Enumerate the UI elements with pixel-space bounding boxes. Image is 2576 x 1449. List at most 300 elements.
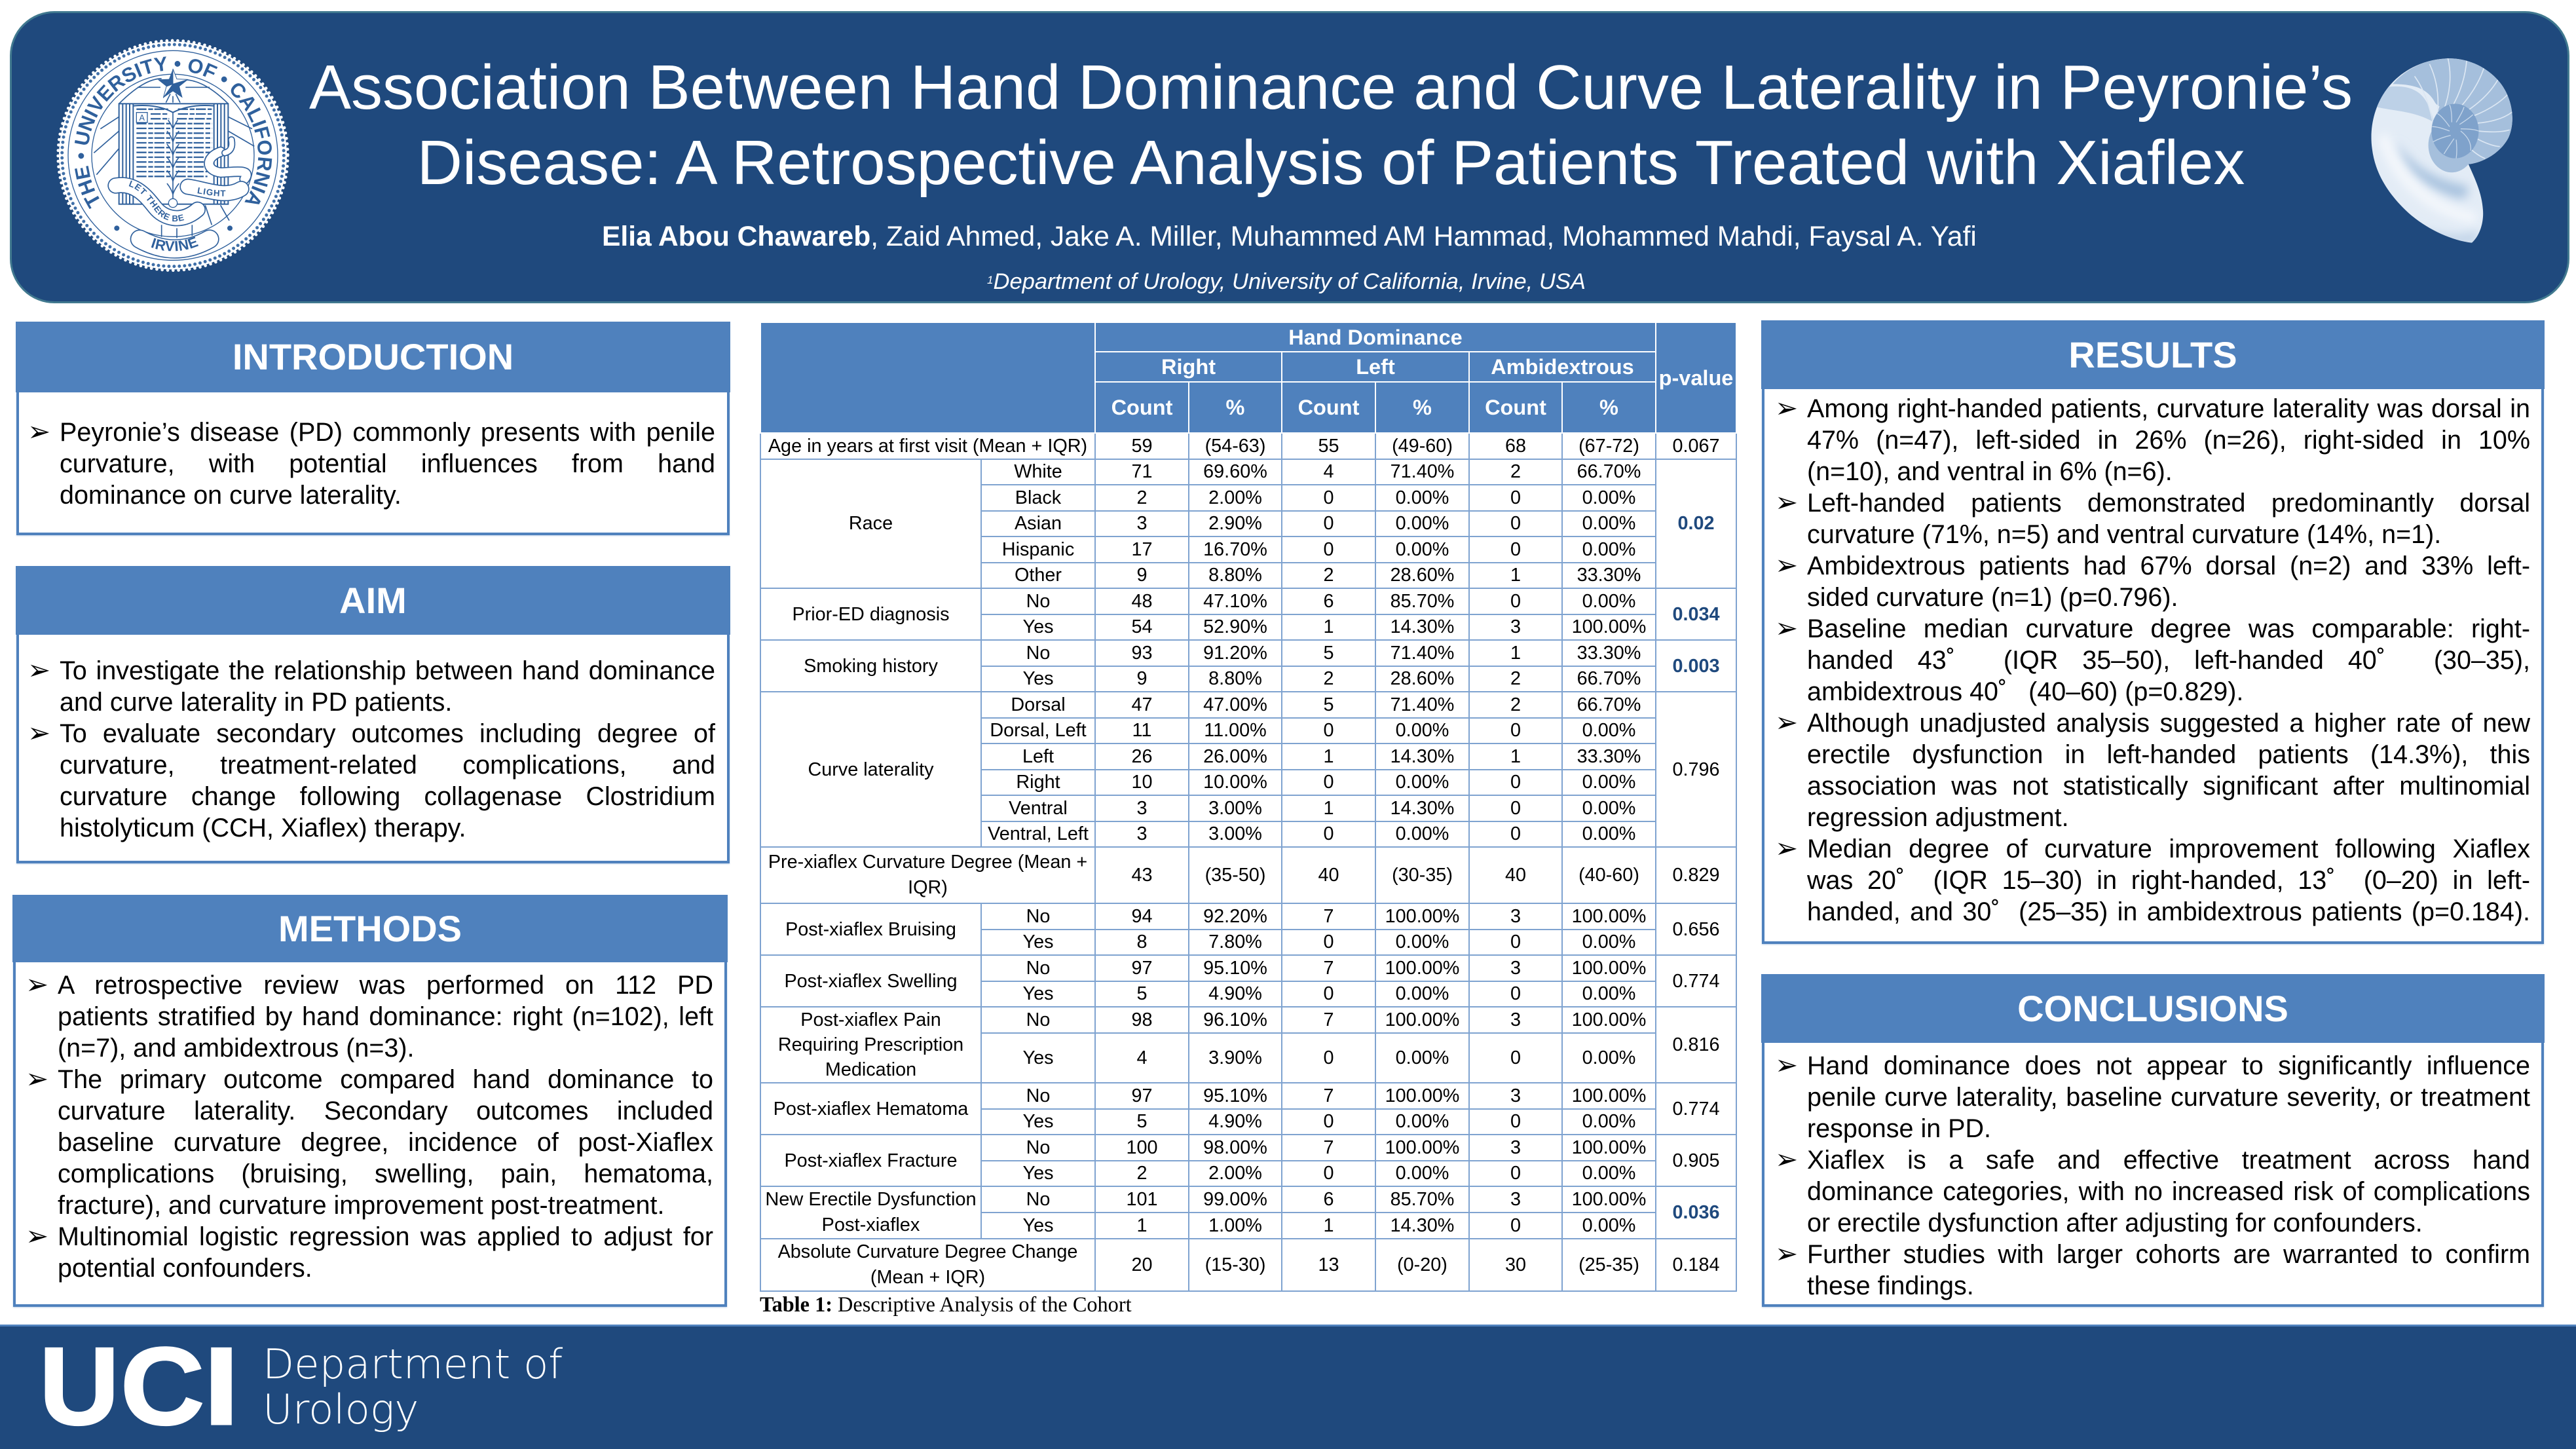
row: pre-xiaflex curvature degree: 40 bbox=[1318, 865, 1339, 886]
rows: new erectile dysfunction: 3 bbox=[1510, 1189, 1521, 1210]
rows: post-xiaflex bruising: 94 bbox=[1131, 906, 1153, 927]
text: results: Among right-handed patients, curvature laterality was dorsal in bbox=[1807, 394, 2530, 423]
text: conclusions: Xiaflex is a safe and effective treatment across hand bbox=[1807, 1146, 2530, 1175]
rows: post-xiaflex fracture: 0.00% bbox=[1582, 1163, 1635, 1184]
rows: race: 0 bbox=[1323, 539, 1334, 560]
rows: curve laterality: 14.30% bbox=[1391, 746, 1454, 767]
rows: prior-ED diagnosis: 54 bbox=[1131, 616, 1153, 637]
rows: post-xiaflex swelling: 0 bbox=[1323, 983, 1334, 1004]
rows: race: 2 bbox=[1136, 487, 1148, 508]
rows: new erectile dysfunction: 99.00% bbox=[1203, 1189, 1267, 1210]
rows: curve laterality: Curve laterality bbox=[808, 759, 934, 780]
rows: post-xiaflex hematoma: 4.90% bbox=[1208, 1111, 1262, 1132]
rows: race: 71.40% bbox=[1391, 461, 1454, 482]
rows: race: 28.60% bbox=[1391, 565, 1454, 586]
row: absolute curvature degree change: (25-35) bbox=[1578, 1254, 1639, 1275]
rows: curve laterality bbox=[808, 694, 1720, 844]
rows: post-xiaflex pain: No bbox=[1026, 1009, 1050, 1030]
rows: race: Other bbox=[1015, 565, 1062, 586]
rows: prior-ED diagnosis: No bbox=[1026, 591, 1050, 612]
panel: results: ➢ bbox=[1775, 486, 1798, 518]
rows: post-xiaflex bruising: 7.80% bbox=[1208, 932, 1262, 952]
rows: smoking history bbox=[804, 643, 1720, 689]
rows: curve laterality: 3.00% bbox=[1208, 823, 1262, 844]
rows: race: 69.60% bbox=[1203, 461, 1267, 482]
rows: race: 0.00% bbox=[1582, 487, 1635, 508]
row: absolute curvature degree change: (Mean + IQR) bbox=[870, 1267, 985, 1288]
rows: post-xiaflex pain: 100.00% bbox=[1572, 1009, 1646, 1030]
rows: post-xiaflex fracture: 98.00% bbox=[1203, 1137, 1267, 1158]
rows: curve laterality: Left bbox=[1022, 746, 1054, 767]
rows: curve laterality: 10.00% bbox=[1203, 772, 1267, 793]
rows: smoking history: Yes bbox=[1023, 668, 1053, 689]
rows: new erectile dysfunction: 1.00% bbox=[1208, 1215, 1262, 1236]
text: results: curvature (71%, n=5) and ventral curvature (14%, n=1). bbox=[1807, 520, 2441, 549]
rows: post-xiaflex bruising: 0 bbox=[1510, 932, 1521, 952]
row: age bbox=[768, 436, 1720, 457]
rows: curve laterality: 0.00% bbox=[1582, 772, 1635, 793]
rows: smoking history: 66.70% bbox=[1577, 668, 1641, 689]
text: methods: potential confounders. bbox=[58, 1254, 312, 1283]
rows: smoking history: 8.80% bbox=[1208, 668, 1262, 689]
text: conclusions: response in PD. bbox=[1807, 1114, 1991, 1143]
text: methods bbox=[26, 968, 713, 1283]
table header: % bbox=[1226, 396, 1244, 419]
row: pre-xiaflex curvature degree: 43 bbox=[1131, 865, 1153, 886]
table header: Left bbox=[1356, 355, 1395, 379]
table header: Count bbox=[1485, 396, 1546, 419]
heading: conclusions bbox=[1761, 974, 2545, 1043]
rows: post-xiaflex hematoma: 5 bbox=[1136, 1111, 1148, 1132]
icon: university seal: A bbox=[139, 113, 145, 122]
row: age: (49-60) bbox=[1392, 436, 1453, 457]
rows: new erectile dysfunction: Yes bbox=[1023, 1215, 1053, 1236]
icon: nautilus shell bbox=[2371, 58, 2512, 243]
panel: results: ➢ bbox=[1775, 832, 1798, 864]
rows: smoking history: 2 bbox=[1510, 668, 1521, 689]
rows: post-xiaflex bruising: No bbox=[1026, 906, 1050, 927]
rows: curve laterality: 1 bbox=[1323, 746, 1334, 767]
rows: curve laterality: 47 bbox=[1131, 694, 1153, 715]
rows: post-xiaflex hematoma: 100.00% bbox=[1572, 1085, 1646, 1106]
rows: post-xiaflex pain: Post-xiaflex Pain bbox=[800, 1009, 941, 1030]
table header: Hand Dominance bbox=[1288, 325, 1463, 348]
rows: post-xiaflex swelling: 95.10% bbox=[1203, 958, 1267, 979]
rows: race: 71 bbox=[1131, 461, 1153, 482]
department name: Urology bbox=[263, 1385, 419, 1433]
rows: smoking history: 5 bbox=[1323, 643, 1334, 664]
rows: post-xiaflex bruising: 0 bbox=[1323, 932, 1334, 952]
rows: race: 2 bbox=[1323, 565, 1334, 586]
panel: conclusions: ➢ bbox=[1775, 1049, 1798, 1081]
rows: smoking history: Smoking history bbox=[804, 655, 938, 676]
table header: % bbox=[1413, 396, 1432, 419]
icon: UCI logo bbox=[33, 1336, 242, 1435]
text: conclusions: Hand dominance does not appear to significantly influence bbox=[1807, 1051, 2530, 1080]
rows: race: White bbox=[1014, 461, 1062, 482]
rows: curve laterality: 0.00% bbox=[1396, 720, 1449, 741]
rows: post-xiaflex swelling: 5 bbox=[1136, 983, 1148, 1004]
rows: curve laterality: 11.00% bbox=[1204, 720, 1267, 741]
panel: methods bbox=[12, 895, 728, 1308]
rows: curve laterality: 0.00% bbox=[1582, 720, 1635, 741]
rows: prior-ED diagnosis: 0.00% bbox=[1582, 591, 1635, 612]
rows: post-xiaflex pain: 0 bbox=[1510, 1047, 1521, 1068]
authors: Elia Abou Chawareb, Zaid Ahmed, Jake A. Miller, Muhammed AM Hammad, Mohammed Mahdi, Faysal A. Yafi bbox=[602, 221, 1977, 252]
text: results: regression adjustment. bbox=[1807, 803, 2069, 832]
rows: smoking history: 0.003 bbox=[1672, 655, 1720, 676]
rows: curve laterality: 26.00% bbox=[1203, 746, 1267, 767]
rows: prior-ED diagnosis: 14.30% bbox=[1391, 616, 1454, 637]
text: methods: A retrospective review was performed on 112 PD bbox=[58, 971, 713, 1000]
rows: new erectile dysfunction: Post-xiaflex bbox=[822, 1214, 920, 1235]
panel: results bbox=[1761, 320, 2545, 945]
rows: race: 8.80% bbox=[1208, 565, 1262, 586]
row: pre-xiaflex curvature degree: Pre-xiaflex Curvature Degree (Mean + bbox=[768, 852, 1087, 873]
text: conclusions: these findings. bbox=[1807, 1271, 1974, 1300]
title: Association Between Hand Dominance and Curve Laterality in Peyronie’s bbox=[309, 52, 2353, 122]
text: methods: fracture), and curvature improvement post-treatment. bbox=[58, 1191, 664, 1220]
text: results: sided curvature (n=1) (p=0.796). bbox=[1807, 583, 2178, 612]
rows: post-xiaflex fracture: 0 bbox=[1323, 1163, 1334, 1184]
heading: introduction: INTRODUCTION bbox=[233, 336, 513, 377]
rows: new erectile dysfunction: No bbox=[1026, 1189, 1050, 1210]
text: results: Left-handed patients demonstrated predominantly dorsal bbox=[1807, 489, 2530, 518]
rows: smoking history: 71.40% bbox=[1391, 643, 1454, 664]
rows: post-xiaflex pain: 0 bbox=[1323, 1047, 1334, 1068]
panel: results: ➢ bbox=[1775, 549, 1798, 581]
title: Disease: A Retrospective Analysis of Patients Treated with Xiaflex bbox=[417, 128, 2245, 198]
row: absolute curvature degree change: (15-30) bbox=[1205, 1254, 1265, 1275]
affiliation: 1Department of Urology, University of California, Irvine, USA bbox=[987, 269, 1586, 294]
text: introduction: dominance on curve laterality. bbox=[60, 481, 401, 510]
rows: post-xiaflex pain: Requiring Prescription bbox=[778, 1034, 963, 1055]
rows: race: 4 bbox=[1323, 461, 1334, 482]
row: age: 0.067 bbox=[1672, 436, 1720, 457]
table header: Right bbox=[1161, 355, 1216, 379]
text: results: (n=10), and ventral in 6% (n=6). bbox=[1807, 457, 2173, 486]
rows: curve laterality: 3 bbox=[1136, 823, 1148, 844]
rows: post-xiaflex swelling: 0.00% bbox=[1396, 983, 1449, 1004]
row: absolute curvature degree change: 13 bbox=[1318, 1254, 1339, 1275]
rows: prior-ED diagnosis: 52.90% bbox=[1203, 616, 1267, 637]
rows: curve laterality: Dorsal bbox=[1011, 694, 1066, 715]
rows: curve laterality: 0.00% bbox=[1396, 823, 1449, 844]
rows: curve laterality: 0 bbox=[1510, 720, 1521, 741]
rows: race: 17 bbox=[1131, 539, 1153, 560]
rows: curve laterality: 0 bbox=[1323, 772, 1334, 793]
rows: post-xiaflex fracture: 100.00% bbox=[1385, 1137, 1459, 1158]
text: methods: The primary outcome compared hand dominance to bbox=[58, 1065, 713, 1094]
rows: post-xiaflex swelling: 0.774 bbox=[1672, 971, 1720, 992]
text: aim bbox=[28, 654, 715, 842]
text: results: Ambidextrous patients had 67% dorsal (n=2) and 33% left- bbox=[1807, 552, 2530, 580]
heading: methods bbox=[12, 895, 728, 962]
rows: race: 2 bbox=[1510, 461, 1521, 482]
title bbox=[309, 52, 2353, 198]
text: methods: Multinomial logistic regression was applied to adjust for bbox=[58, 1222, 713, 1251]
rows: post-xiaflex pain bbox=[778, 1009, 1720, 1080]
heading: conclusions: CONCLUSIONS bbox=[2017, 988, 2288, 1029]
rows: race: Race bbox=[849, 513, 893, 534]
rows: post-xiaflex hematoma: Yes bbox=[1023, 1111, 1053, 1132]
rows: post-xiaflex swelling: 3 bbox=[1510, 958, 1521, 979]
rows: race: 2.00% bbox=[1208, 487, 1262, 508]
rows: prior-ED diagnosis: 85.70% bbox=[1391, 591, 1454, 612]
rows: post-xiaflex bruising bbox=[785, 906, 1720, 952]
table header: % bbox=[1599, 396, 1618, 419]
rows: curve laterality: 0.00% bbox=[1582, 798, 1635, 819]
rows: post-xiaflex bruising: Yes bbox=[1023, 932, 1053, 952]
rows: post-xiaflex fracture: 2 bbox=[1136, 1163, 1148, 1184]
row: absolute curvature degree change: (0-20) bbox=[1397, 1254, 1447, 1275]
rows: new erectile dysfunction: 1 bbox=[1323, 1215, 1334, 1236]
rows: smoking history: 33.30% bbox=[1577, 643, 1641, 664]
rows: curve laterality: 0 bbox=[1323, 720, 1334, 741]
text: conclusions: dominance categories, with no increased risk of complications bbox=[1807, 1177, 2530, 1206]
row: pre-xiaflex curvature degree: (35-50) bbox=[1205, 865, 1265, 886]
row: pre-xiaflex curvature degree: 40 bbox=[1505, 865, 1526, 886]
text: aim: curvature, treatment-related complications, and bbox=[60, 751, 715, 780]
department name: Department of bbox=[263, 1340, 563, 1388]
rows: smoking history: 93 bbox=[1131, 643, 1153, 664]
rows: post-xiaflex pain: 98 bbox=[1131, 1009, 1153, 1030]
text: conclusions bbox=[1807, 1050, 2530, 1302]
rows: curve laterality: 0 bbox=[1510, 823, 1521, 844]
rows: post-xiaflex pain: 4 bbox=[1136, 1047, 1148, 1068]
rows: new erectile dysfunction: 100.00% bbox=[1572, 1189, 1646, 1210]
rows: curve laterality: Ventral bbox=[1009, 798, 1068, 819]
rows: prior-ED diagnosis: 0.034 bbox=[1672, 604, 1720, 625]
rows: post-xiaflex fracture: 100 bbox=[1126, 1137, 1158, 1158]
rows: new erectile dysfunction: 0.00% bbox=[1582, 1215, 1635, 1236]
rows: race: 0 bbox=[1510, 539, 1521, 560]
rows: curve laterality: 47.00% bbox=[1203, 694, 1267, 715]
rows: race: Asian bbox=[1015, 513, 1062, 534]
rows: post-xiaflex fracture: 3 bbox=[1510, 1137, 1521, 1158]
table: descriptive analysis of the cohort bbox=[760, 323, 1737, 1292]
rows: curve laterality: 26 bbox=[1131, 746, 1153, 767]
panel: methods: ➢ bbox=[26, 1220, 48, 1252]
heading: aim bbox=[16, 566, 730, 635]
text: aim: To evaluate secondary outcomes including degree of bbox=[60, 719, 715, 748]
rows: post-xiaflex bruising: 100.00% bbox=[1385, 906, 1459, 927]
rows: race: 66.70% bbox=[1577, 461, 1641, 482]
rows: post-xiaflex hematoma: 0 bbox=[1323, 1111, 1334, 1132]
row: pre-xiaflex curvature degree: (40-60) bbox=[1578, 865, 1639, 886]
heading: methods: METHODS bbox=[278, 908, 462, 949]
rows: post-xiaflex hematoma: 100.00% bbox=[1385, 1085, 1459, 1106]
rows: post-xiaflex swelling: 0.00% bbox=[1582, 983, 1635, 1004]
rows: post-xiaflex fracture: 7 bbox=[1323, 1137, 1334, 1158]
panel: aim: ➢ bbox=[28, 717, 50, 749]
rows: race: 2.90% bbox=[1208, 513, 1262, 534]
text: conclusions: or erectile dysfunction after adjusting for confounders. bbox=[1807, 1209, 2423, 1237]
text: methods: baseline curvature degree, incidence of post-Xiaflex bbox=[58, 1128, 713, 1157]
text: methods: patients stratified by hand dominance: right (n=102), left bbox=[58, 1002, 713, 1031]
rows: post-xiaflex fracture: 0 bbox=[1510, 1163, 1521, 1184]
rows: post-xiaflex pain: 3.90% bbox=[1208, 1047, 1262, 1068]
rows: new erectile dysfunction: 1 bbox=[1136, 1215, 1148, 1236]
row: absolute curvature degree change: Absolute Curvature Degree Change bbox=[778, 1241, 1077, 1262]
rows: post-xiaflex hematoma: 97 bbox=[1131, 1085, 1153, 1106]
text: aim: curvature change following collagenase Clostridium bbox=[60, 782, 715, 811]
rows: curve laterality: 0.00% bbox=[1396, 772, 1449, 793]
row: absolute curvature degree change bbox=[778, 1241, 1720, 1288]
rows: curve laterality: 0 bbox=[1323, 823, 1334, 844]
text: results: handed 43˚ (IQR 35–50), left-handed 40˚ (30–35), bbox=[1807, 646, 2530, 675]
text: results bbox=[1775, 392, 2531, 926]
rows: curve laterality: 10 bbox=[1131, 772, 1153, 793]
rows: new erectile dysfunction: 85.70% bbox=[1391, 1189, 1454, 1210]
rows: post-xiaflex bruising: 7 bbox=[1323, 906, 1334, 927]
heading: aim: AIM bbox=[339, 580, 407, 621]
rows: post-xiaflex swelling bbox=[784, 958, 1720, 1004]
text: conclusions: Further studies with larger cohorts are warranted to confirm bbox=[1807, 1240, 2530, 1269]
rows: race: 0.00% bbox=[1396, 513, 1449, 534]
rows: curve laterality: 0 bbox=[1510, 772, 1521, 793]
rows: curve laterality: 2 bbox=[1510, 694, 1521, 715]
panel: conclusions bbox=[1761, 974, 2545, 1308]
rows: post-xiaflex hematoma bbox=[774, 1085, 1720, 1132]
panel: results: ➢ bbox=[1775, 706, 1798, 738]
rows: prior-ED diagnosis: 0 bbox=[1510, 591, 1521, 612]
text: methods: complications (bruising, swelling, pain, hematoma, bbox=[58, 1159, 713, 1188]
rows: race: 1 bbox=[1510, 565, 1521, 586]
panel: results: ➢ bbox=[1775, 612, 1798, 644]
row: age: (54-63) bbox=[1205, 436, 1265, 457]
rows: post-xiaflex hematoma: 3 bbox=[1510, 1085, 1521, 1106]
rows: race: Hispanic bbox=[1002, 539, 1074, 560]
rows: curve laterality: 0.796 bbox=[1672, 759, 1720, 780]
panel: introduction bbox=[16, 322, 730, 536]
table header: Ambidextrous bbox=[1491, 355, 1634, 379]
rows: prior-ED diagnosis bbox=[792, 591, 1720, 637]
rows: curve laterality: 66.70% bbox=[1577, 694, 1641, 715]
rows: post-xiaflex pain: 100.00% bbox=[1385, 1009, 1459, 1030]
rows: curve laterality: Dorsal, Left bbox=[990, 720, 1087, 741]
rows: post-xiaflex bruising: 100.00% bbox=[1572, 906, 1646, 927]
rows: prior-ED diagnosis: 100.00% bbox=[1572, 616, 1646, 637]
text: results: ambidextrous 40˚ (40–60) (p=0.829). bbox=[1807, 677, 2243, 706]
panel: aim bbox=[16, 566, 730, 865]
text: results: Baseline median curvature degree was comparable: right- bbox=[1807, 614, 2530, 643]
row: pre-xiaflex curvature degree: (30-35) bbox=[1392, 865, 1453, 886]
rays bbox=[94, 79, 254, 238]
rows: post-xiaflex bruising: 3 bbox=[1510, 906, 1521, 927]
rows: race: 16.70% bbox=[1203, 539, 1267, 560]
rows: prior-ED diagnosis: 3 bbox=[1510, 616, 1521, 637]
rows: curve laterality: 0 bbox=[1510, 798, 1521, 819]
icon: university seal: LET THERE BE bbox=[128, 181, 185, 221]
rows: post-xiaflex swelling: Post-xiaflex Swelling bbox=[784, 971, 958, 992]
text: introduction: curvature, with potential influences from hand bbox=[60, 449, 715, 478]
rows: post-xiaflex hematoma: No bbox=[1026, 1085, 1050, 1106]
rows: curve laterality: 14.30% bbox=[1391, 798, 1454, 819]
ribbons bbox=[116, 140, 246, 249]
rows: post-xiaflex pain: 3 bbox=[1510, 1009, 1521, 1030]
rows: new erectile dysfunction: 14.30% bbox=[1391, 1215, 1454, 1236]
rows: prior-ED diagnosis: Prior-ED diagnosis bbox=[792, 604, 950, 625]
rows: race: 0.00% bbox=[1582, 513, 1635, 534]
row: absolute curvature degree change: 20 bbox=[1131, 1254, 1153, 1275]
rows: post-xiaflex pain: Medication bbox=[825, 1059, 916, 1080]
rows: race bbox=[849, 461, 1715, 586]
rows: race: 0 bbox=[1323, 513, 1334, 534]
rows: prior-ED diagnosis: 47.10% bbox=[1203, 591, 1267, 612]
rows: curve laterality: 11 bbox=[1132, 720, 1151, 741]
row: pre-xiaflex curvature degree bbox=[768, 852, 1720, 898]
rows: new erectile dysfunction: New Erectile Dysfunction bbox=[765, 1189, 977, 1210]
row: absolute curvature degree change: 0.184 bbox=[1672, 1254, 1720, 1275]
text: aim: and curve laterality in PD patients. bbox=[60, 688, 452, 717]
rows: post-xiaflex hematoma: Post-xiaflex Hematoma bbox=[774, 1098, 968, 1119]
rows: post-xiaflex bruising: Post-xiaflex Bruising bbox=[785, 918, 956, 939]
rows: curve laterality: 3.00% bbox=[1208, 798, 1262, 819]
rows: smoking history: 2 bbox=[1323, 668, 1334, 689]
text: aim: To investigate the relationship between hand dominance bbox=[60, 656, 715, 685]
panel: methods: ➢ bbox=[26, 968, 48, 1000]
rows: post-xiaflex bruising: 0.656 bbox=[1672, 918, 1720, 939]
row: pre-xiaflex curvature degree: IQR) bbox=[908, 877, 948, 898]
text: methods: (n=7), and ambidextrous (n=3). bbox=[58, 1034, 415, 1063]
text: conclusions: penile curve laterality, baseline curvature severity, or treatment bbox=[1807, 1083, 2530, 1112]
icon: university seal: LIGHT bbox=[198, 187, 225, 197]
icon: university seal: THE • UNIVERSITY • OF • CALIFORNIA bbox=[75, 56, 272, 210]
table header: p-value bbox=[1659, 366, 1733, 389]
rows: post-xiaflex pain: 0.00% bbox=[1396, 1047, 1449, 1068]
rows: smoking history: No bbox=[1026, 643, 1050, 664]
rows: new erectile dysfunction: 6 bbox=[1323, 1189, 1334, 1210]
table header bbox=[761, 323, 1736, 432]
rows: post-xiaflex fracture: 2.00% bbox=[1208, 1163, 1262, 1184]
rows: post-xiaflex bruising: 8 bbox=[1136, 932, 1148, 952]
text: results: was 20˚ (IQR 15–30) in right-handed, 13˚ (0–20) in left- bbox=[1807, 866, 2530, 895]
rows: post-xiaflex hematoma: 0.00% bbox=[1582, 1111, 1635, 1132]
text: results: Although unadjusted analysis suggested a higher rate of new bbox=[1807, 709, 2530, 738]
rows: post-xiaflex swelling: 0 bbox=[1510, 983, 1521, 1004]
text: results: Median degree of curvature improvement following Xiaflex bbox=[1807, 835, 2530, 863]
rows: post-xiaflex hematoma: 0 bbox=[1510, 1111, 1521, 1132]
table header: Count bbox=[1111, 396, 1172, 419]
rows: post-xiaflex fracture: 0.00% bbox=[1396, 1163, 1449, 1184]
rows: post-xiaflex bruising: 0.00% bbox=[1396, 932, 1449, 952]
rows: race: 0.00% bbox=[1582, 539, 1635, 560]
footer band bbox=[0, 1325, 2576, 1449]
rows: race: 33.30% bbox=[1577, 565, 1641, 586]
row: pre-xiaflex curvature degree: 0.829 bbox=[1672, 865, 1720, 886]
rows: race: 9 bbox=[1136, 565, 1148, 586]
rows: post-xiaflex pain: Yes bbox=[1023, 1047, 1053, 1068]
rows: post-xiaflex pain: 0.00% bbox=[1582, 1047, 1635, 1068]
rows: post-xiaflex hematoma: 0.00% bbox=[1396, 1111, 1449, 1132]
panel: aim: ➢ bbox=[28, 654, 50, 686]
text: results: association was not statistically significant after multinomial bbox=[1807, 772, 2530, 800]
rows: post-xiaflex fracture: Yes bbox=[1023, 1163, 1053, 1184]
row: age: (67-72) bbox=[1578, 436, 1639, 457]
rows: curve laterality: 1 bbox=[1510, 746, 1521, 767]
rows: post-xiaflex pain: 96.10% bbox=[1203, 1009, 1267, 1030]
panel: conclusions: ➢ bbox=[1775, 1143, 1798, 1175]
department name bbox=[263, 1342, 563, 1432]
rows: race: 0 bbox=[1510, 487, 1521, 508]
rows: curve laterality: 71.40% bbox=[1391, 694, 1454, 715]
header banner bbox=[10, 11, 2569, 303]
rows: prior-ED diagnosis: 6 bbox=[1323, 591, 1334, 612]
table caption: Table 1: Descriptive Analysis of the Cohort bbox=[760, 1292, 1132, 1316]
text: introduction: Peyronie’s disease (PD) commonly presents with penile bbox=[60, 418, 715, 447]
heading: introduction bbox=[16, 322, 730, 392]
